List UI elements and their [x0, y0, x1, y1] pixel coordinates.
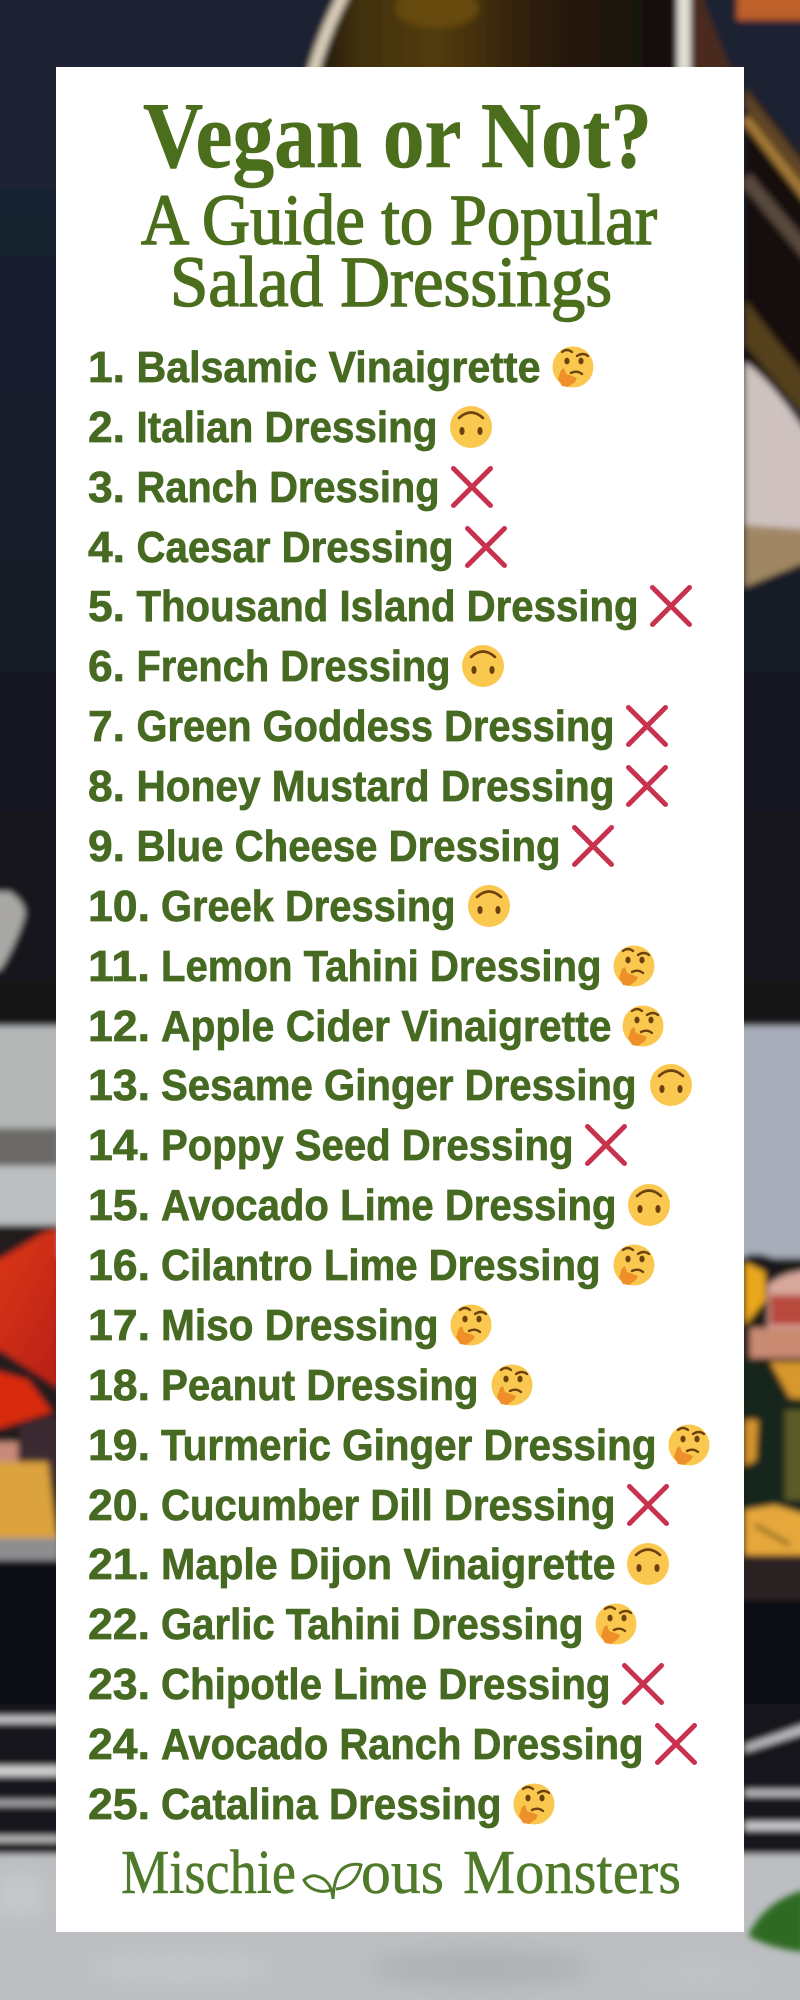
item 22: Garlic Tahini Dressing — [161, 1600, 584, 1649]
item 21: 21. — [88, 1540, 150, 1589]
title: Vegan or Not? — [143, 84, 652, 188]
item 16: 16. — [88, 1241, 150, 1290]
item 3: 3. — [88, 463, 125, 512]
salad right — [740, 1254, 800, 1725]
item 12: Apple Cider Vinaigrette — [161, 1002, 612, 1051]
salad left — [0, 1225, 60, 1706]
item 10: 10. — [88, 882, 150, 931]
item 9: Blue Cheese Dressing — [136, 822, 560, 871]
item 14: 14. — [88, 1121, 150, 1170]
item 19: 19. — [88, 1421, 150, 1470]
item 7: Green Goddess Dressing — [136, 702, 614, 751]
icon: leaf — [304, 1864, 361, 1899]
item 11: Lemon Tahini Dressing — [161, 942, 602, 991]
leaf — [748, 1890, 800, 1952]
item 2: Italian Dressing — [136, 403, 438, 452]
item 15: 15. — [88, 1181, 150, 1230]
item 10: Greek Dressing — [161, 882, 456, 931]
item 23: 23. — [88, 1660, 150, 1709]
item 18: Peanut Dressing — [161, 1361, 478, 1410]
item 4: 4. — [88, 523, 125, 572]
item 7: 7. — [88, 702, 125, 751]
item 19: Turmeric Ginger Dressing — [161, 1421, 656, 1470]
item 9: 9. — [88, 822, 125, 871]
item 3: Ranch Dressing — [136, 463, 440, 512]
item 20: Cucumber Dill Dressing — [161, 1481, 616, 1530]
item 21: Maple Dijon Vinaigrette — [161, 1540, 616, 1589]
item 1: Balsamic Vinaigrette — [136, 343, 540, 392]
item 17: 17. — [88, 1301, 150, 1350]
item 18: 18. — [88, 1361, 150, 1410]
item 22: 22. — [88, 1600, 150, 1649]
striped cloth — [0, 1704, 800, 1856]
item 14: Poppy Seed Dressing — [161, 1121, 574, 1170]
item 25: 25. — [88, 1780, 150, 1829]
item 2: 2. — [88, 403, 125, 452]
item 25: Catalina Dressing — [161, 1780, 502, 1829]
item 17: Miso Dressing — [161, 1301, 438, 1350]
item 20: 20. — [88, 1481, 150, 1530]
footer logo: Monsters — [463, 1839, 681, 1907]
footer logo: ous — [361, 1839, 444, 1907]
item 8: 8. — [88, 762, 125, 811]
item 11: 11. — [88, 942, 150, 991]
subtitle: A Guide to Popular — [141, 180, 657, 260]
list of salad dressings — [88, 343, 710, 1829]
item 6: 6. — [88, 642, 125, 691]
item 6: French Dressing — [136, 642, 450, 691]
footer logo: Mischie — [121, 1839, 296, 1907]
item 23: Chipotle Lime Dressing — [161, 1660, 610, 1709]
subtitle: Salad Dressings — [170, 242, 612, 322]
item 24: Avocado Ranch Dressing — [161, 1720, 644, 1769]
item 16: Cilantro Lime Dressing — [161, 1241, 600, 1290]
item 5: Thousand Island Dressing — [136, 582, 638, 631]
item 24: 24. — [88, 1720, 150, 1769]
item 1: 1. — [88, 343, 125, 392]
footer logo — [121, 1839, 681, 1907]
pitcher — [305, 0, 800, 587]
item 5: 5. — [88, 582, 125, 631]
subtitle — [141, 180, 657, 322]
item 8: Honey Mustard Dressing — [136, 762, 614, 811]
item 15: Avocado Lime Dressing — [161, 1181, 616, 1230]
marble mottling — [0, 1873, 760, 1987]
item 12: 12. — [88, 1002, 150, 1051]
item 13: 13. — [88, 1061, 150, 1110]
item 13: Sesame Ginger Dressing — [161, 1061, 636, 1110]
item 4: Caesar Dressing — [136, 523, 454, 572]
